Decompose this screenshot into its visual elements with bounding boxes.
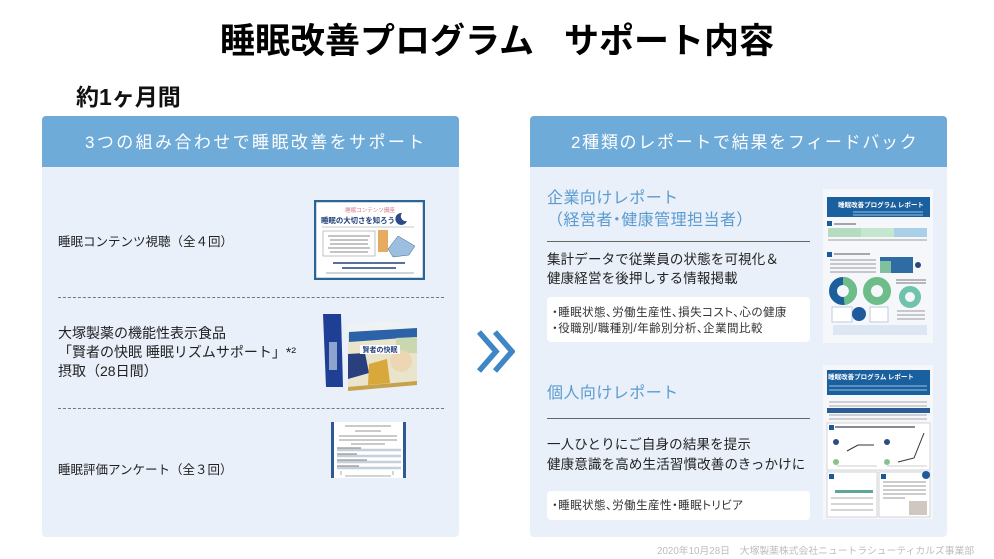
image: product stick and box: [323, 314, 417, 391]
panel heading: 3つの組み合わせで睡眠改善をサポート: [85, 133, 427, 152]
heading: corporate report: （経営者・健康管理担当者）: [547, 212, 753, 229]
text: sleep survey: 睡眠評価アンケート（全３回）: [58, 463, 233, 477]
panel heading: [530, 116, 947, 167]
panel heading: 2種類のレポートで結果をフィードバック: [571, 133, 918, 152]
arrow: double chevron: [477, 330, 515, 373]
image: sleep content slide: 睡眠の大切さを知ろう: [321, 215, 395, 226]
image: survey sheet: [331, 422, 406, 478]
text: corporate description: 集計データで従業員の状態を可視化＆: [547, 252, 779, 267]
panel: three-part support: [42, 116, 459, 537]
text: personal description: 健康意識を高め生活習慣改善のきっかけに: [547, 457, 805, 472]
box: corporate contents: [547, 297, 810, 342]
text: functional food: 「賢者の快眠 睡眠リズムサポート」*²: [58, 344, 296, 360]
heading: corporate report: 企業向けレポート: [547, 190, 679, 207]
footer note: 2020年10月28日 大塚製薬株式会社ニュートラシューティカルズ事業部: [657, 546, 974, 557]
text: personal description: 一人ひとりにご自身の結果を提示: [547, 437, 751, 452]
image: personal report thumbnail: 睡眠改善プログラム レポート: [828, 371, 914, 381]
image: sleep content slide: 睡眠コンテンツ講座: [345, 206, 395, 214]
divider: [58, 297, 444, 298]
text: personal description: [547, 437, 805, 472]
image: sleep content slide: [314, 200, 425, 280]
text: corporate description: 健康経営を後押しする情報掲載: [547, 271, 738, 286]
panel heading: [42, 116, 459, 167]
panel: two reports: [530, 116, 947, 537]
title: 睡眠改善プログラム サポート内容: [220, 22, 774, 61]
period label: 約1ヶ月間: [76, 84, 181, 110]
heading: personal report: 個人向けレポート: [547, 385, 679, 402]
text: functional food: 大塚製薬の機能性表示食品: [58, 325, 226, 341]
rule: [547, 241, 810, 242]
rule: [547, 418, 810, 419]
image: personal report thumbnail: [823, 365, 933, 519]
heading: corporate report: [547, 189, 753, 229]
image: corporate report thumbnail: 睡眠改善プログラム レポート: [838, 199, 924, 209]
text: functional food: [58, 325, 296, 379]
text: sleep content viewing: 睡眠コンテンツ視聴（全４回）: [58, 235, 233, 249]
divider: [58, 408, 444, 409]
box: personal contents: [547, 491, 810, 520]
image: product stick and box: 賢者の快眠: [362, 345, 398, 355]
text: corporate description: [547, 252, 779, 286]
box: corporate contents: ・役職別/職種別/年齢別分析、企業間比較: [552, 323, 763, 335]
image: corporate report thumbnail: [823, 189, 933, 343]
box: personal contents: ・睡眠状態、労働生産性・睡眠トリビア: [552, 500, 743, 512]
text: functional food: 摂取（28日間）: [58, 363, 158, 379]
box: corporate contents: ・睡眠状態、労働生産性、損失コスト、心の健康: [552, 307, 787, 319]
